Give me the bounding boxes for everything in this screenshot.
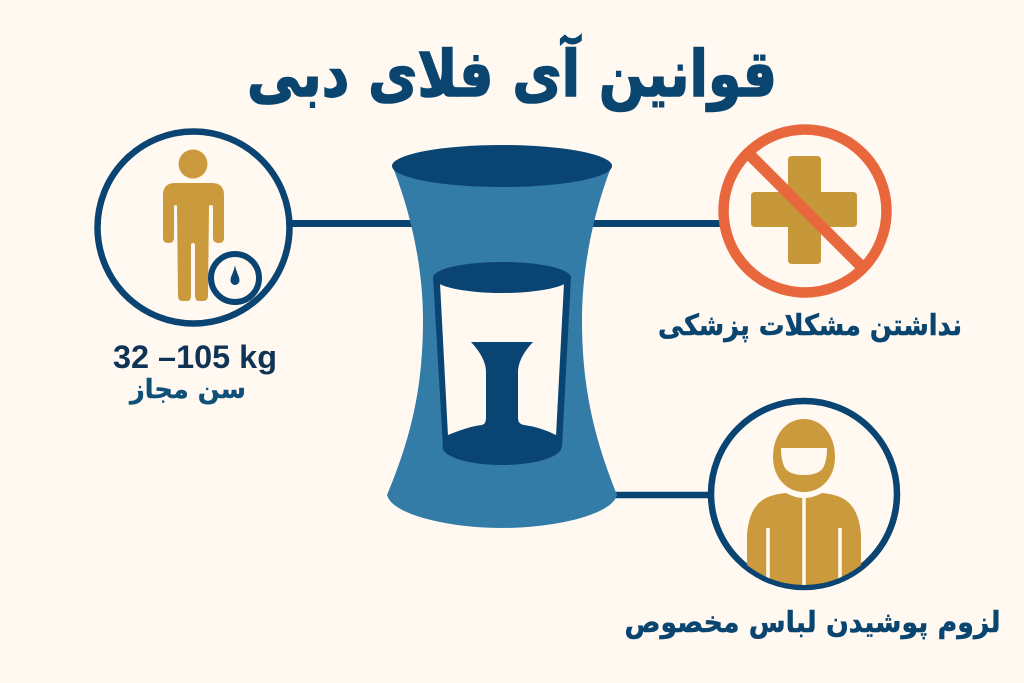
label: allowed range: سن مجاز <box>128 375 246 405</box>
icon: no medical problems <box>724 130 886 292</box>
icon: suit and helmet <box>711 401 897 600</box>
label: special suit required: لزوم پوشیدن لباس مخصوص <box>624 605 1000 640</box>
title: قوانین آی فلای دبی <box>247 34 777 112</box>
wind tunnel illustration <box>387 145 617 528</box>
tunnel window <box>433 262 571 465</box>
connector: weight to tunnel <box>288 220 415 227</box>
connector: medical to tunnel <box>590 220 725 227</box>
weight range text: 32 –105 kg <box>113 339 277 375</box>
icon: person with weight gauge <box>98 132 290 324</box>
connector: suit to tunnel <box>612 492 712 498</box>
label: no medical problems: نداشتن مشکلات پزشکی <box>658 308 962 343</box>
